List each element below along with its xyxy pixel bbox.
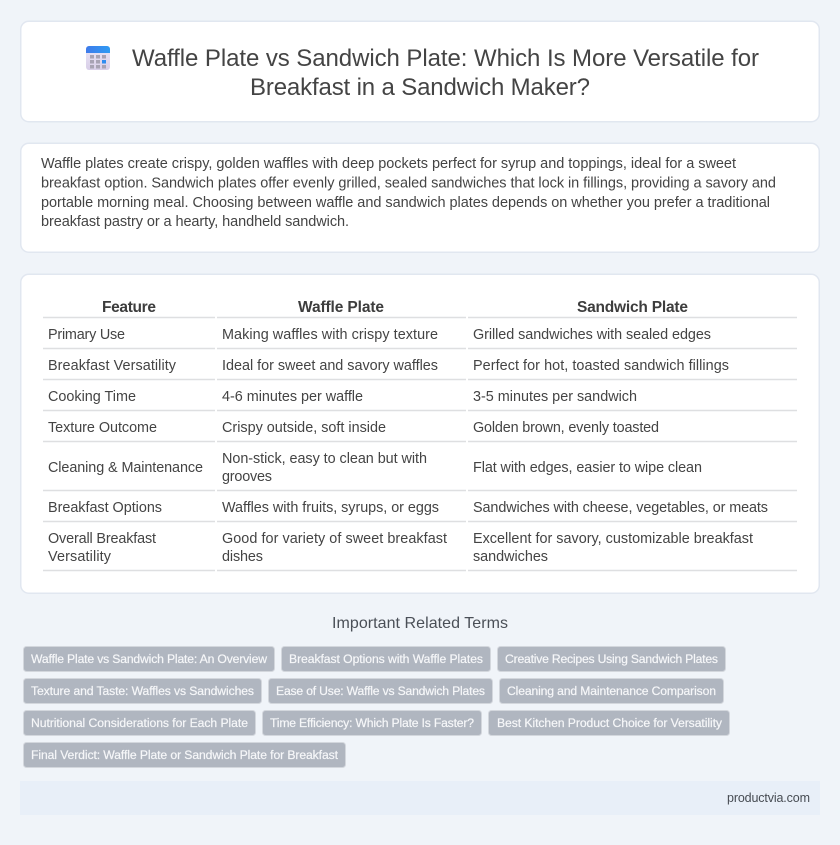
- row: primary use: Making waffles with crispy texture: [222, 327, 438, 343]
- row: cooking time: 3-5 minutes per sandwich: [473, 389, 637, 405]
- chip: [488, 710, 730, 736]
- row: breakfast options: Waffles with fruits, syrups, or eggs: [222, 500, 439, 516]
- table header row: Sandwich Plate: [577, 299, 688, 316]
- row: cleaning and maintenance: Flat with edges, easier to wipe clean: [473, 460, 702, 476]
- row: cooking time: Cooking Time: [48, 389, 136, 405]
- panel: intro text: [21, 143, 819, 252]
- row: primary use: Grilled sandwiches with sealed edges: [473, 327, 711, 343]
- chip: Waffle Plate vs Sandwich Plate: An Overview: [31, 652, 267, 666]
- row: overall breakfast versatility: Overall Breakfast: [48, 531, 156, 547]
- intro paragraph: [41, 156, 776, 230]
- row: primary use: [48, 327, 711, 343]
- chip: Breakfast Options with Waffle Plates: [289, 652, 483, 666]
- table header row: Feature: [102, 299, 156, 316]
- row: cooking time: 4-6 minutes per waffle: [222, 389, 363, 405]
- intro paragraph: Waffle plates create crispy, golden waffles with deep pockets perfect for syrup and toppings, ideal for a sweet: [41, 156, 736, 172]
- row: primary use: Primary Use: [48, 327, 125, 343]
- row: overall breakfast versatility: Versatility: [48, 549, 112, 565]
- row: breakfast versatility: [48, 358, 729, 374]
- chip: Final Verdict: Waffle Plate or Sandwich Plate for Breakfast: [31, 748, 339, 762]
- chip: Texture and Taste: Waffles vs Sandwiches: [31, 684, 254, 698]
- row: cleaning and maintenance: Cleaning & Maintenance: [48, 460, 203, 476]
- chip: [268, 678, 492, 704]
- chip: [498, 646, 726, 672]
- row: texture outcome: Crispy outside, soft inside: [222, 420, 386, 436]
- row: cleaning and maintenance: [48, 451, 702, 485]
- row: texture outcome: Texture Outcome: [48, 420, 157, 436]
- row: texture outcome: Golden brown, evenly toasted: [473, 420, 659, 436]
- icon: calendar: [86, 46, 110, 70]
- row: breakfast versatility: Perfect for hot, toasted sandwich fillings: [473, 358, 729, 374]
- chip: Nutritional Considerations for Each Plate: [31, 716, 248, 730]
- row: overall breakfast versatility: Good for variety of sweet breakfast: [222, 531, 447, 547]
- table header row: [102, 299, 688, 316]
- chip: Ease of Use: Waffle vs Sandwich Plates: [276, 684, 485, 698]
- title: [132, 45, 759, 101]
- intro paragraph: portable morning meal. Choosing between waffle and sandwich plates depends on whether you prefer a traditional: [41, 195, 770, 211]
- related term chips: [24, 646, 730, 768]
- row: texture outcome: [48, 420, 659, 436]
- chip: [24, 678, 262, 704]
- chip: Time Efficiency: Which Plate Is Faster?: [270, 716, 474, 730]
- panel: header: [21, 21, 819, 122]
- intro paragraph: breakfast option. Sandwich plates offer evenly grilled, sealed sandwiches that lock in fillings, providing a savory and: [41, 176, 776, 192]
- row: cooking time: [48, 389, 637, 405]
- chip: Best Kitchen Product Choice for Versatility: [497, 716, 723, 730]
- row: overall breakfast versatility: Excellent for savory, customizable breakfast: [473, 531, 753, 547]
- row: cleaning and maintenance: Non-stick, easy to clean but with: [222, 451, 427, 467]
- footer source text: productvia.com: [727, 791, 810, 805]
- row: breakfast versatility: Breakfast Versatility: [48, 358, 177, 374]
- row: cleaning and maintenance: grooves: [222, 469, 272, 485]
- chip: Creative Recipes Using Sandwich Plates: [505, 652, 718, 666]
- chip: [24, 742, 346, 768]
- row: breakfast versatility: Ideal for sweet and savory waffles: [222, 358, 438, 374]
- panel: comparison table: [21, 274, 819, 593]
- chip: [500, 678, 724, 704]
- chip: [24, 646, 274, 672]
- row: overall breakfast versatility: sandwiches: [473, 549, 548, 565]
- intro paragraph: breakfast pastry or a hearty, handheld sandwich.: [41, 214, 349, 230]
- row: breakfast options: [48, 500, 768, 516]
- footer bar: [20, 781, 820, 815]
- chip: Cleaning and Maintenance Comparison: [507, 684, 716, 698]
- chip: [262, 710, 482, 736]
- chip: [24, 710, 256, 736]
- row: breakfast options: Sandwiches with cheese, vegetables, or meats: [473, 500, 768, 516]
- row: overall breakfast versatility: dishes: [222, 549, 263, 565]
- title: Breakfast in a Sandwich Maker?: [250, 74, 590, 101]
- row: breakfast options: Breakfast Options: [48, 500, 162, 516]
- heading: important related terms: Important Related Terms: [332, 615, 508, 632]
- title: Waffle Plate vs Sandwich Plate: Which Is More Versatile for: [132, 45, 759, 72]
- row: overall breakfast versatility: [48, 531, 753, 565]
- chip: [282, 646, 490, 672]
- table header row: Waffle Plate: [298, 299, 384, 316]
